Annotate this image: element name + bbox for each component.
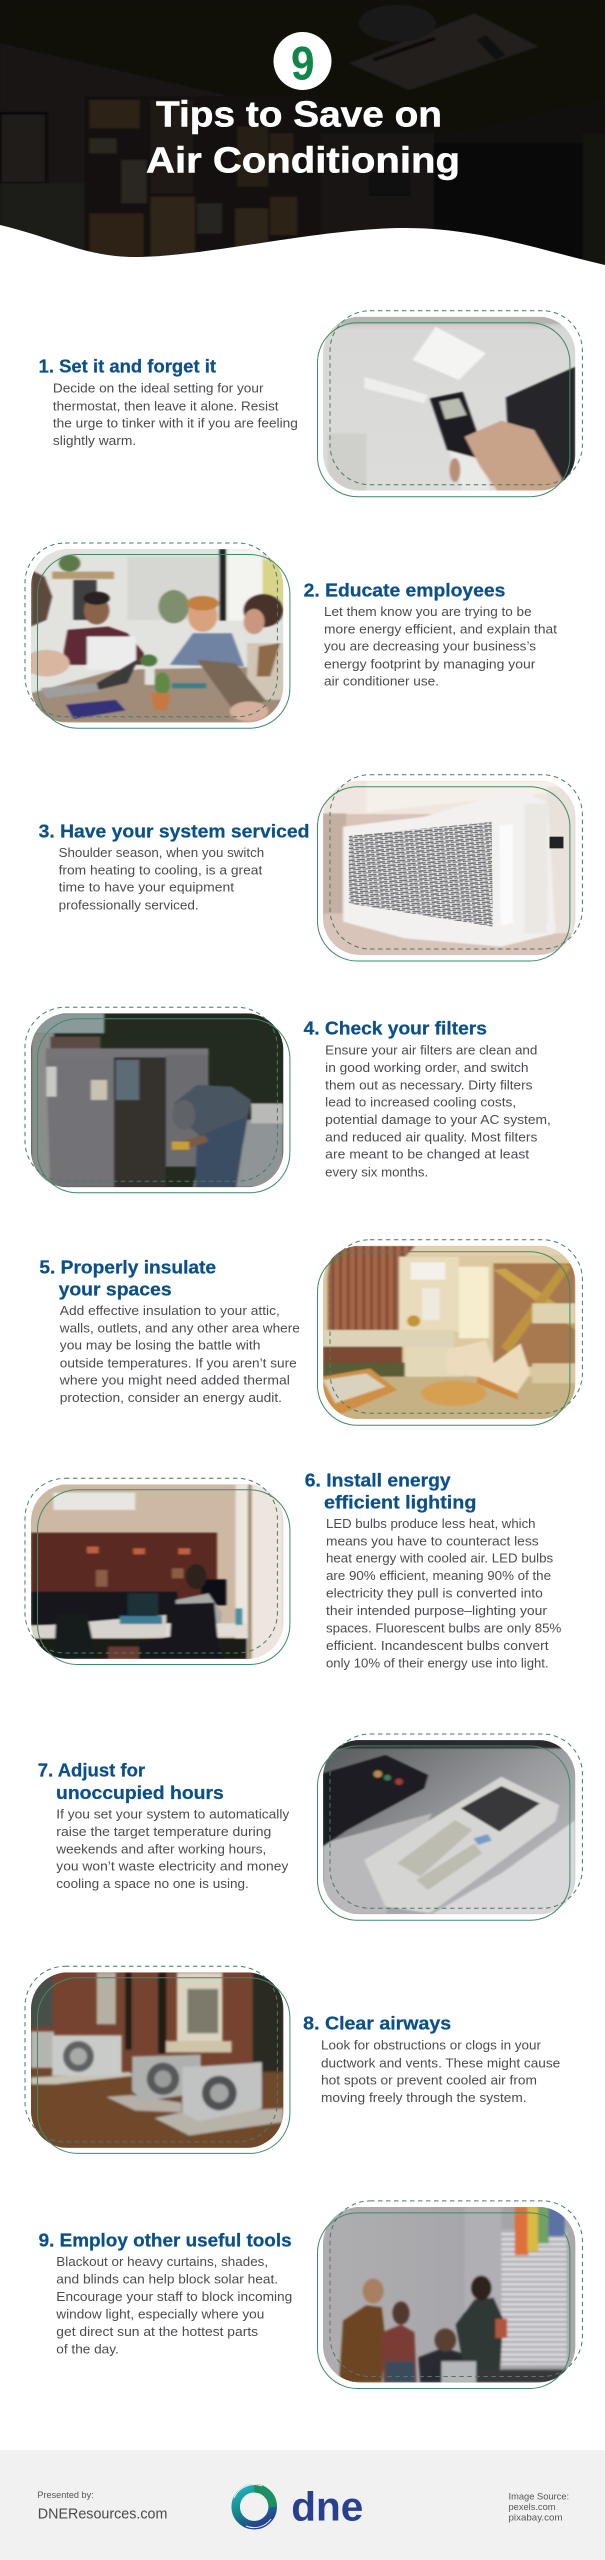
- tip 3 photo frames: [318, 775, 582, 961]
- tip 4 body text: them out as necessary. Dirty filters: [325, 1077, 532, 1092]
- badge: number 9: [274, 32, 332, 90]
- tip 5 body text: where you might need added thermal: [59, 1373, 290, 1388]
- tip 6 body text: heat energy with cooled air. LED bulbs: [326, 1551, 553, 1566]
- tip 9 photo frames: [318, 2201, 582, 2388]
- tip 1 heading: 1. Set it and forget it: [39, 356, 216, 377]
- tip 6 body text: [326, 1516, 561, 1670]
- presenter credit: [37, 2490, 167, 2523]
- tip 7 photo: remotes on a sheet: [323, 1740, 575, 1914]
- tip 3 photo: white air conditioning unit: [323, 781, 575, 955]
- image sources: Image Source:: [508, 2491, 569, 2502]
- tip 5 body text: walls, outlets, and any other area where: [59, 1320, 300, 1335]
- header photo: dark office ceiling: [0, 0, 605, 265]
- tip 8 photo: outdoor condenser units by brick wall: [31, 1972, 283, 2148]
- panel: tip 1: [39, 311, 582, 497]
- tip 5 heading: 5. Properly insulate: [39, 1256, 216, 1277]
- tip 5 heading: your spaces: [59, 1278, 172, 1299]
- tip 4 body text: potential damage to your AC system,: [325, 1112, 551, 1127]
- tip 7 body text: weekends and after working hours,: [55, 1841, 266, 1856]
- tip 4 photo: technician at outdoor unit: [31, 1013, 283, 1187]
- title text: [146, 94, 460, 180]
- tip 4 heading: 4. Check your filters: [304, 1018, 487, 1039]
- tip 9 body text: Encourage your staff to block incoming: [56, 2289, 292, 2304]
- tip 8 body text: [321, 2038, 560, 2105]
- tip 9 body text: get direct sun at the hottest parts: [56, 2324, 258, 2339]
- tip 6 body text: electricity they pull is converted into: [326, 1586, 543, 1601]
- tip 8 photo frames: [25, 1966, 290, 2153]
- tip 5 heading: [39, 1256, 216, 1299]
- tip 9 body text: [55, 2254, 292, 2356]
- image sources: pexels.com: [508, 2502, 556, 2513]
- tip 9 body text: window light, especially where you: [55, 2306, 264, 2321]
- tip 6 body text: only 10% of their energy use into light.: [326, 1655, 549, 1670]
- tip 9 body text: of the day.: [56, 2342, 119, 2356]
- tip 6 body text: means you have to counteract less: [326, 1533, 539, 1548]
- image sources: [508, 2491, 569, 2524]
- tip 7 body text: If you set your system to automatically: [56, 1806, 290, 1821]
- icon: dne logo ring: [234, 2485, 273, 2528]
- tip 7 heading: unoccupied hours: [56, 1782, 224, 1803]
- tip 7 heading: [38, 1760, 224, 1803]
- tip 6 body text: spaces. Fluorescent bulbs are only 85%: [326, 1620, 561, 1635]
- tip 9 body text: and blinds can help block solar heat.: [56, 2271, 278, 2286]
- tip 6 body text: their intended purpose–lighting your: [326, 1603, 548, 1618]
- tip 8 heading: 8. Clear airways: [303, 2012, 451, 2033]
- panel: tip 6: [25, 1470, 561, 1670]
- panel: tip 9: [39, 2201, 582, 2388]
- title text: Air Conditioning: [146, 139, 460, 180]
- tip 6 body text: are 90% efficient, meaning 90% of the: [326, 1568, 551, 1583]
- tip 4 body text: in good working order, and switch: [325, 1060, 528, 1075]
- tip 3 body text: professionally serviced.: [59, 897, 199, 912]
- tip 1 photo frames: [318, 311, 582, 497]
- tip 3 body text: [59, 845, 264, 912]
- tip 5 body text: outside temperatures. If you aren’t sure: [60, 1355, 297, 1370]
- presenter credit: DNEResources.com: [38, 2507, 167, 2523]
- tip 1 body text: [53, 381, 298, 448]
- tip 9 heading: 9. Employ other useful tools: [39, 2229, 292, 2250]
- tip 6 body text: efficient. Incandescent bulbs convert: [326, 1638, 549, 1653]
- tip 7 body text: raise the target temperature during: [56, 1824, 271, 1839]
- badge: number 9: 9: [291, 36, 314, 90]
- panel: tip 4: [25, 1007, 551, 1193]
- tip 7 body text: you won’t waste electricity and money: [56, 1859, 289, 1874]
- tip 1 body text: the urge to tinker with it if you are feeling: [53, 416, 298, 431]
- tip 8 body text: hot spots or prevent cooled air from: [321, 2073, 537, 2088]
- tip 5 body text: you may be losing the battle with: [60, 1338, 260, 1353]
- tip 3 body text: time to have your equipment: [59, 880, 235, 895]
- tip 9 photo: team looking at a laptop: [323, 2207, 575, 2382]
- tip 7 photo frames: [318, 1734, 582, 1920]
- tip 2 body text: [324, 604, 557, 689]
- panel: tip 3: [39, 775, 582, 961]
- tip 4 body text: and reduced air quality. Most filters: [325, 1129, 537, 1144]
- tip 1 body text: thermostat, then leave it alone. Resist: [53, 398, 279, 413]
- tip 6 photo frames: [25, 1478, 290, 1664]
- tip 6 photo: person working in office: [31, 1484, 283, 1659]
- panel: tip 5: [39, 1240, 582, 1425]
- tip 4 body text: are meant to be changed at least: [325, 1147, 530, 1162]
- tip 2 body text: you are decreasing your business’s: [324, 639, 536, 654]
- panel: tip 2: [23, 543, 557, 728]
- tip 6 heading: 6. Install energy: [305, 1470, 451, 1491]
- panel: tip 8: [25, 1966, 560, 2153]
- tip 2 photo frames: [25, 543, 290, 728]
- tip 4 photo frames: [25, 1007, 290, 1193]
- title text: Tips to Save on: [156, 94, 442, 135]
- tip 2 body text: more energy efficient, and explain that: [324, 621, 557, 636]
- panel: tip 7: [38, 1734, 582, 1920]
- tip 5 body text: protection, consider an energy audit.: [60, 1390, 282, 1405]
- tip 2 body text: energy footprint by managing your: [324, 656, 536, 671]
- tip 2 heading: 2. Educate employees: [304, 580, 505, 601]
- tip 1 body text: Decide on the ideal setting for your: [53, 381, 264, 396]
- tip 1 photo: remote control in hand: [323, 317, 575, 491]
- tip 7 body text: cooling a space no one is using.: [56, 1876, 249, 1891]
- tip 4 body text: every six months.: [325, 1164, 428, 1179]
- tip 2 body text: Let them know you are trying to be: [324, 604, 532, 619]
- logo wordmark: dne: [291, 2484, 363, 2530]
- tip 5 photo frames: [318, 1240, 582, 1425]
- tip 3 body text: Shoulder season, when you switch: [59, 845, 264, 860]
- tip 6 heading: [305, 1470, 476, 1513]
- tip 5 photo: warm lounge interior: [323, 1246, 575, 1419]
- tip 5 body text: [59, 1303, 300, 1405]
- tip 4 body text: lead to increased cooling costs,: [325, 1095, 516, 1110]
- tip 4 body text: Ensure your air filters are clean and: [325, 1042, 537, 1057]
- tip 2 body text: air conditioner use.: [324, 674, 439, 689]
- tip 8 body text: moving freely through the system.: [321, 2090, 527, 2105]
- tip 7 heading: 7. Adjust for: [38, 1760, 145, 1781]
- tip 7 body text: [55, 1806, 290, 1891]
- title block: [146, 32, 460, 180]
- image sources: pixabay.com: [508, 2513, 563, 2524]
- tip 3 heading: 3. Have your system serviced: [39, 820, 309, 841]
- tip 6 heading: efficient lighting: [324, 1492, 476, 1513]
- tip 9 body text: Blackout or heavy curtains, shades,: [56, 2254, 268, 2269]
- footer: [0, 2450, 605, 2560]
- tip 2 photo: team at table: [23, 549, 283, 723]
- tip 6 body text: LED bulbs produce less heat, which: [326, 1516, 536, 1531]
- tip 3 body text: from heating to cooling, is a great: [59, 862, 263, 877]
- tip 8 body text: ductwork and vents. These might cause: [321, 2055, 560, 2070]
- tip 8 body text: Look for obstructions or clogs in your: [321, 2038, 542, 2052]
- tip 1 body text: slightly warm.: [53, 433, 136, 448]
- presenter credit: Presented by:: [37, 2490, 94, 2501]
- tip 4 body text: [325, 1042, 551, 1179]
- tip 5 body text: Add effective insulation to your attic,: [60, 1303, 280, 1318]
